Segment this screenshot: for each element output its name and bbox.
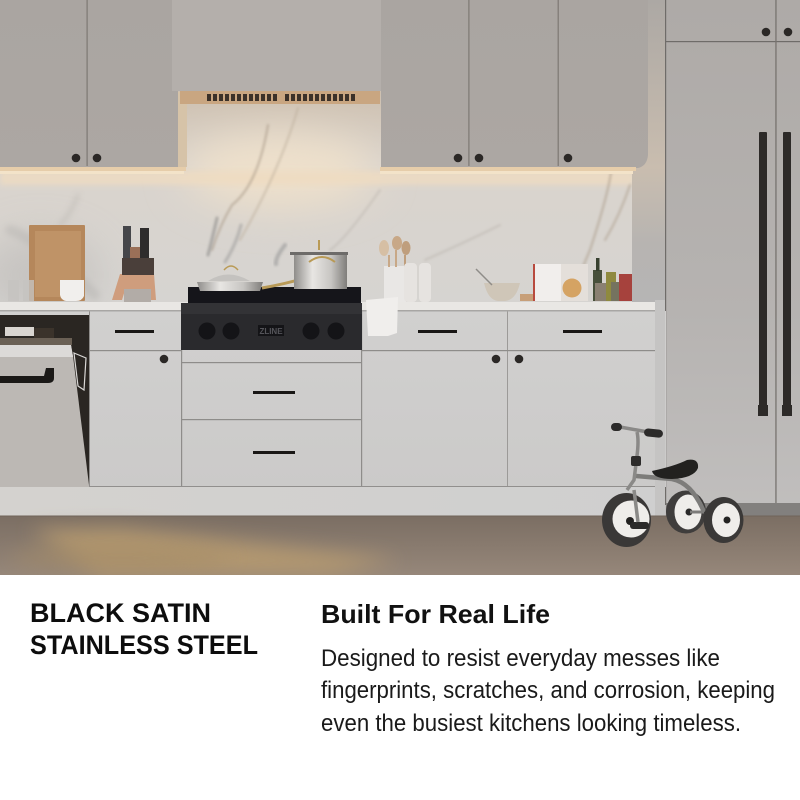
rear left wheel — [666, 490, 706, 534]
bottles and jars — [593, 258, 632, 301]
caption panel — [0, 575, 800, 800]
body text: even the busiest kitchens looking timeless. — [321, 710, 741, 737]
bowls — [60, 280, 84, 301]
base cabinets — [0, 311, 666, 488]
front fork and stem — [627, 432, 638, 522]
left upper cabinets — [0, 0, 187, 167]
body text: fingerprints, scratches, and corrosion, keeping — [321, 677, 775, 704]
floor — [0, 515, 800, 575]
cookbook — [533, 264, 588, 301]
right upper cabinets — [381, 0, 648, 168]
saute pan — [197, 266, 305, 291]
glasses — [8, 280, 34, 301]
toe kick — [0, 487, 655, 517]
ceramic bottles — [404, 263, 431, 302]
brand badge: ZLINE — [259, 327, 283, 336]
under-cabinet light strips — [0, 167, 636, 174]
towel — [366, 297, 398, 336]
front wheel — [602, 493, 651, 547]
drawer pulls — [115, 330, 602, 454]
range hood — [172, 0, 381, 104]
tricycle — [602, 423, 744, 547]
dishwasher handle — [0, 368, 54, 383]
door knobs — [160, 355, 523, 363]
fridge handles — [758, 132, 792, 416]
body text — [321, 645, 775, 737]
subheading: Built For Real Life — [321, 599, 550, 629]
tall fridge panels — [665, 0, 800, 520]
knife block — [112, 226, 156, 302]
kitchen scene — [0, 0, 800, 575]
dishwasher — [0, 315, 89, 487]
cutting board — [29, 225, 85, 301]
heading: product finish: BLACK SATIN — [30, 598, 211, 628]
countertop — [0, 302, 655, 312]
stock pot — [290, 240, 348, 289]
control knobs — [198, 322, 344, 340]
handlebar — [611, 423, 663, 438]
side panel — [655, 300, 665, 520]
heading: product finish: STAINLESS STEEL — [30, 630, 258, 660]
seat — [652, 460, 698, 479]
heading: product finish — [30, 598, 258, 660]
side wall — [632, 0, 666, 304]
utensil crock — [379, 236, 410, 302]
frame — [636, 476, 704, 512]
body text: Designed to resist everyday messes like — [321, 645, 720, 672]
rear right wheel — [704, 497, 744, 543]
cooktop range — [181, 287, 362, 350]
mixing bowl — [476, 269, 548, 301]
marble backsplash — [0, 88, 634, 315]
